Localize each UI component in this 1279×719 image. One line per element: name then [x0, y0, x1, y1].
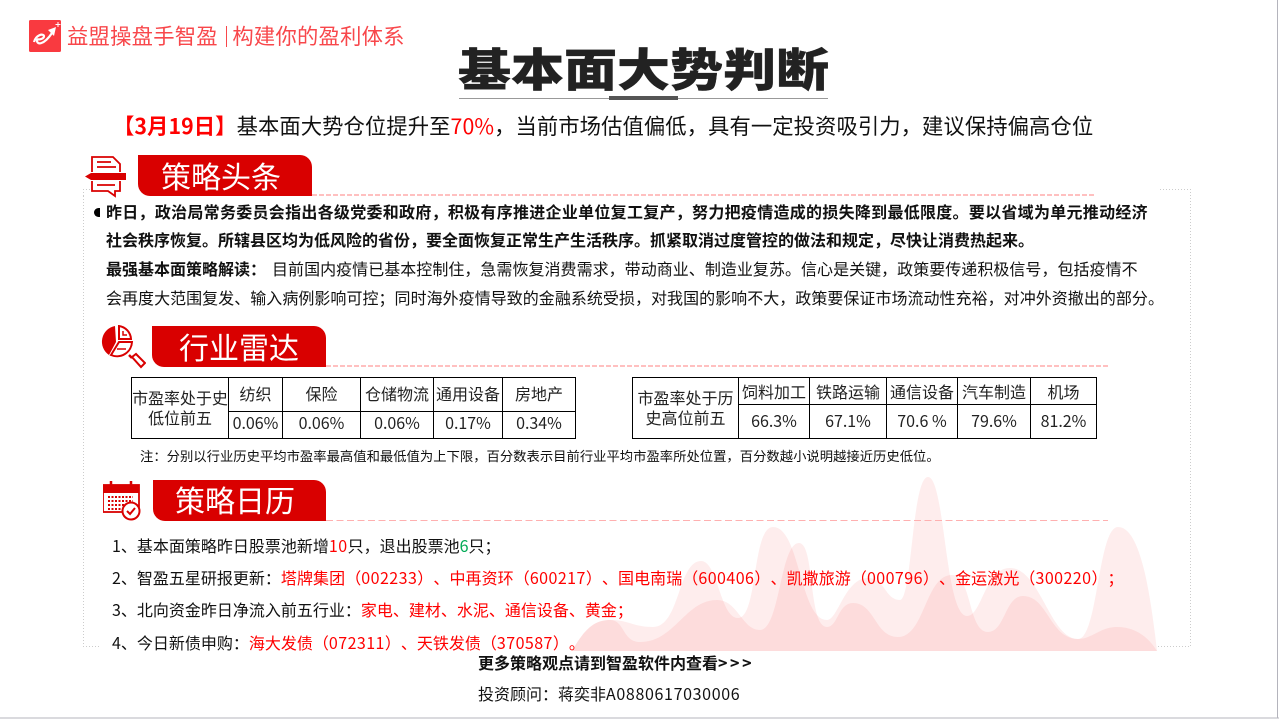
- icon: document with pen: [85, 156, 126, 198]
- tab heading: 策略日历: [175, 477, 295, 521]
- adviser: 投资顾问：蒋奕非A0880617030006: [478, 681, 740, 705]
- icon: calendar: [103, 481, 140, 520]
- table: lowest valuation: [131, 377, 576, 439]
- item 1: 1、基本面策略昨日股票池新增10只，退出股票池6只；: [112, 533, 500, 557]
- title underline: [459, 98, 828, 99]
- bold line 2: 社会秩序恢复。所辖县区均为低风险的省份，要全面恢复正常生产生活秩序。抓紧取消过度管控的做法和规定，尽快让消费热起来。: [106, 227, 1034, 251]
- table footnote: 注：分别以行业历史平均市盈率最高值和最低值为上下限，百分数表示目前行业平均市盈率所处位置，百分数越小说明越接近历史低位。: [140, 446, 940, 465]
- tab heading: 策略头条: [161, 153, 281, 197]
- table: highest valuation: 67.1%: [825, 408, 871, 432]
- table: highest valuation: 饲料加工: [742, 379, 806, 403]
- bullet: [94, 208, 100, 217]
- table: lowest valuation: 保险: [305, 381, 338, 405]
- table: lowest valuation: 低位前五: [148, 405, 212, 429]
- table: highest valuation: 79.6%: [971, 408, 1017, 432]
- tab heading: [138, 155, 312, 196]
- interpretation line 1: 最强基本面策略解读： 目前国内疫情已基本控制住，急需恢复消费需求，带动商业、制造业复苏。信心是关键，政策要传递积极信号，包括疫情不: [106, 256, 1138, 280]
- table: highest valuation: [632, 377, 1097, 439]
- divider: [326, 365, 1110, 367]
- logo text: 益盟操盘手智盈 构建你的盈利体系: [67, 20, 405, 51]
- table: highest valuation: 史高位前五: [645, 404, 726, 428]
- icon: magnifier with pie: [102, 325, 146, 368]
- table: lowest valuation: 房地产: [515, 381, 563, 405]
- footer link: 更多策略观点请到智盈软件内查看>>>: [478, 650, 754, 674]
- headline paragraph: [94, 199, 1164, 309]
- headline summary: 【3月19日】基本面大势仓位提升至70%，当前市场估值偏低，具有一定投资吸引力，建议保持偏高仓位: [113, 110, 1093, 141]
- table: highest valuation: 66.3%: [751, 408, 797, 432]
- table: lowest valuation: 仓储物流: [365, 381, 429, 405]
- section: 行业雷达: [102, 324, 1108, 368]
- table: highest valuation: 机场: [1047, 379, 1080, 403]
- table: lowest valuation: 通用设备: [436, 381, 500, 405]
- calendar list: [112, 533, 1124, 654]
- table: highest valuation: 汽车制造: [962, 379, 1026, 403]
- table: lowest valuation: 市盈率处于史: [132, 385, 228, 409]
- logo: [29, 20, 405, 52]
- divider: [326, 520, 1108, 521]
- table: highest valuation: 70.6 %: [897, 408, 947, 432]
- divider: [312, 194, 1094, 196]
- tab heading: [153, 480, 326, 521]
- tab heading: [152, 326, 326, 367]
- item 3: 3、北向资金昨日净流入前五行业：家电、建材、水泥、通信设备、黄金；: [112, 597, 633, 621]
- interpretation line 2: 会再度大范围复发、输入病例影响可控；同时海外疫情导致的金融系统受损，对我国的影响不大，政策要保证市场流动性充裕，对冲外资撤出的部分。: [106, 285, 1164, 309]
- section: 策略头条: [85, 153, 1094, 198]
- item 2: 2、智盈五星研报更新：塔牌集团（002233）、中再资环（600217）、国电南瑞（600406）、凯撒旅游（000796）、金运激光（300220）；: [112, 565, 1124, 589]
- tab heading: 行业雷达: [179, 324, 299, 368]
- table: highest valuation: 铁路运输: [816, 379, 880, 403]
- title: [458, 35, 829, 100]
- section: 策略日历: [103, 477, 1108, 521]
- table: highest valuation: 81.2%: [1041, 408, 1086, 432]
- title text: 基本面大势判断: [458, 35, 829, 100]
- table: highest valuation: 市盈率处于历: [637, 384, 734, 408]
- table: lowest valuation: 纺织: [239, 381, 272, 405]
- item 4: 4、今日新债申购：海大发债（072311）、天铁发债（370587）。: [112, 630, 585, 654]
- icon: logo mark: [29, 20, 61, 52]
- bold line 1: 昨日，政治局常务委员会指出各级党委和政府，积极有序推进企业单位复工复产，努力把疫情造成的损失降到最低限度。要以省域为单元推动经济: [106, 199, 1148, 223]
- table: highest valuation: 通信设备: [890, 379, 954, 403]
